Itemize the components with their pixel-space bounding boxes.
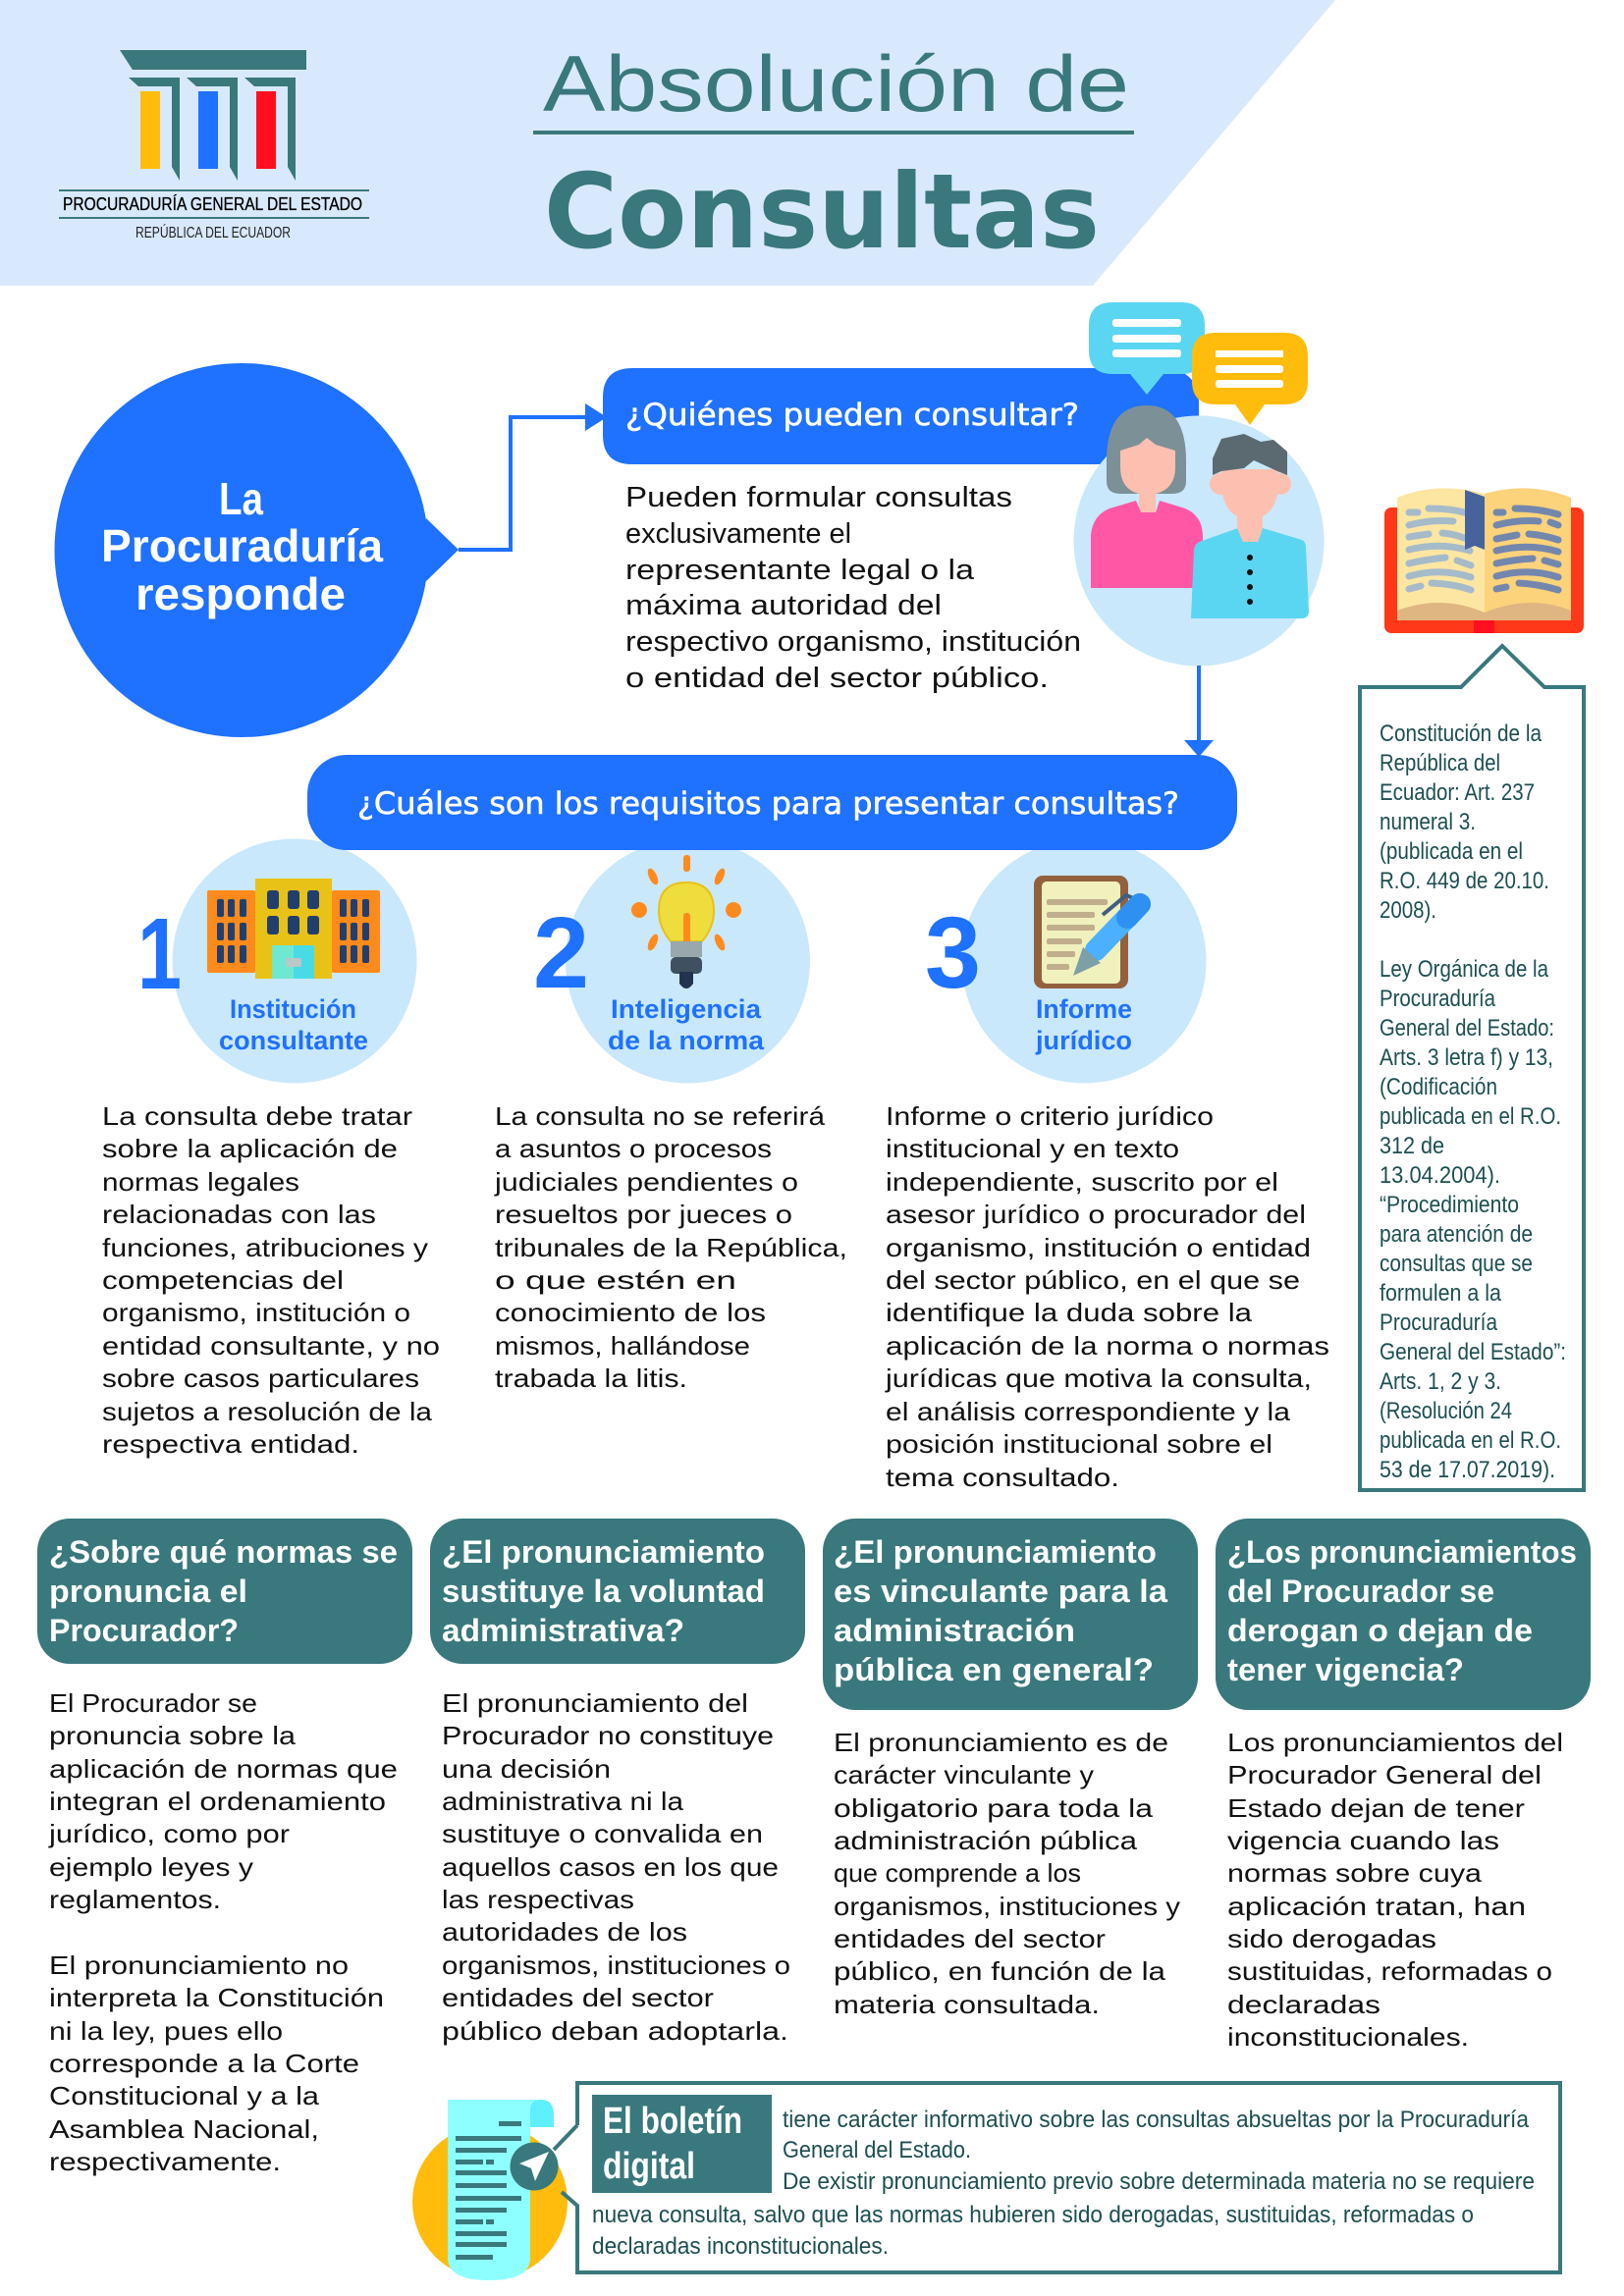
panel: sobre qué normas: respectivamente. [49, 2147, 281, 2176]
text: step 3: jurídicas que motiva la consulta, [885, 1363, 1312, 1393]
panel: legal references: publicada en el R.O. [1380, 1427, 1561, 1454]
panel: vigencia: sido derogadas [1227, 1924, 1436, 1953]
step 1: institución consultante: Institución [230, 994, 356, 1024]
panel: vinculante: administración [834, 1613, 1075, 1648]
text: quiénes pueden consultar: exclusivamente el [625, 518, 851, 550]
panel: El boletín digital: General del Estado. [783, 2137, 971, 2163]
text: step 2: resueltos por jueces o [495, 1200, 792, 1229]
panel: El boletín digital: De existir pronunciamiento previo sobre determinada materia no se requiere [783, 2168, 1535, 2195]
panel: legal references: (publicada en el [1380, 838, 1523, 865]
panel: vigencia: tener vigencia? [1227, 1652, 1464, 1687]
step 1: institución consultante: consultante [219, 1026, 368, 1055]
logo: Procuraduría General del Estado [59, 50, 369, 241]
step 3: informe jurídico: jurídico [1035, 1026, 1132, 1055]
logo: Procuraduría General del Estado: PROCURADURÍA GENERAL DEL ESTADO [63, 194, 362, 214]
panel: sobre qué normas: jurídico, como por [48, 1819, 290, 1848]
text: step 2: judiciales pendientes o [494, 1167, 798, 1197]
panel: sustituye la voluntad administrativa: ¿El pronunciamiento [442, 1534, 765, 1570]
panel: vigencia: del Procurador se [1227, 1574, 1494, 1609]
step 1: institución consultante [137, 879, 380, 1055]
title: Consultas [544, 152, 1100, 272]
text: step 2 [494, 1101, 847, 1393]
panel: sustituye la voluntad administrativa: público deban adoptarla. [442, 2016, 788, 2046]
panel: vigencia: ¿Los pronunciamientos [1227, 1534, 1577, 1570]
panel: legal references: Ley Orgánica de la [1380, 956, 1549, 983]
panel: vinculante: carácter vinculante y [834, 1760, 1094, 1789]
text: step 2: trabada la litis. [495, 1363, 687, 1393]
panel: vigencia: derogan o dejan de [1227, 1613, 1533, 1648]
panel: legal references: 13.04.2004). [1380, 1162, 1500, 1189]
panel: legal references: Procuraduría [1380, 986, 1496, 1012]
panel: El boletín digital: El boletín [603, 2101, 742, 2142]
step 2: inteligencia de la norma: Inteligencia [611, 994, 762, 1024]
panel: legal references: publicada en el R.O. [1380, 1103, 1561, 1130]
text: step 1: entidad consultante, y no [102, 1331, 440, 1361]
icon: open book [1384, 488, 1584, 633]
panel: sobre qué normas: Asamblea Nacional, [49, 2114, 319, 2144]
panel: sustituye la voluntad administrativa: las respectivas [442, 1885, 634, 1914]
pill: Quiénes pueden consultar: ¿Quiénes pueden consultar? [625, 398, 1079, 433]
panel: sobre qué normas: Constitucional y a la [49, 2081, 320, 2110]
text: step 1: sobre casos particulares [102, 1363, 419, 1393]
panel: vigencia: Estado dejan de tener [1227, 1793, 1525, 1823]
panel: sustituye la voluntad administrativa: El pronunciamiento del [442, 1688, 748, 1718]
panel: vinculante: pública en general? [834, 1652, 1154, 1687]
panel: sobre qué normas: integran el ordenamiento [49, 1787, 386, 1816]
panel: sobre qué normas: ni la ley, pues ello [49, 2016, 283, 2046]
panel: vinculante: organismos, instituciones y [834, 1892, 1180, 1921]
text: step 1: La consulta debe tratar [102, 1101, 412, 1131]
panel: legal references: Ecuador: Art. 237 [1380, 779, 1535, 806]
panel: vigencia: Los pronunciamientos del [1227, 1728, 1563, 1757]
callout: La Procuraduría responde [55, 363, 459, 737]
panel: sustituye la voluntad administrativa: Procurador no constituye [442, 1721, 774, 1750]
panel: vinculante: ¿El pronunciamiento [834, 1534, 1157, 1570]
text: step 1: sobre la aplicación de [102, 1134, 398, 1163]
panel: vinculante [823, 1519, 1198, 2019]
panel: vigencia: declaradas [1227, 1990, 1380, 2019]
panel: sobre qué normas: El pronunciamiento no [49, 1950, 349, 1980]
panel: vigencia: aplicación tratan, han [1227, 1892, 1526, 1921]
text: step 2: La consulta no se referirá [495, 1101, 826, 1131]
text: step 2: mismos, hallándose [495, 1331, 750, 1361]
panel: sobre qué normas: ¿Sobre qué normas se [49, 1534, 398, 1570]
panel: legal references: General del Estado: [1380, 1015, 1554, 1041]
text: quiénes pueden consultar: respectivo organismo, institución [625, 626, 1081, 658]
panel: El boletín digital: digital [603, 2146, 695, 2187]
text: step 1: relacionadas con las [102, 1200, 376, 1229]
panel: sustituye la voluntad administrativa: sustituye o convalida en [442, 1819, 763, 1848]
text: step 3: organismo, institución o entidad [886, 1233, 1311, 1262]
panel: legal references: 2008). [1380, 897, 1436, 924]
text: step 1: competencias del [102, 1265, 344, 1295]
text: step 3: aplicación de la norma o normas [886, 1331, 1329, 1361]
arrow: circle to first question [459, 403, 607, 550]
panel: sobre qué normas: El Procurador se [49, 1688, 257, 1718]
text: step 3: identifique la duda sobre la [886, 1298, 1253, 1327]
panel: El boletín digital: tiene carácter informativo sobre las consultas absueltas por la Procuraduría [783, 2107, 1530, 2133]
panel: vinculante: que comprende a los [834, 1858, 1081, 1888]
text: quiénes pueden consultar: máxima autoridad del [625, 590, 942, 621]
text: step 3: posición institucional sobre el [886, 1429, 1272, 1459]
text: step 2: conocimiento de los [495, 1298, 766, 1327]
panel: legal references: 53 de 17.07.2019). [1380, 1457, 1555, 1483]
title [533, 40, 1134, 272]
panel: legal references: (Resolución 24 [1380, 1398, 1512, 1424]
step 3: informe jurídico [925, 876, 1140, 1055]
panel: sustituye la voluntad administrativa: administrativa ni la [442, 1787, 684, 1816]
text: quiénes pueden consultar: Pueden formular consultas [625, 482, 1012, 513]
text: step 3: institucional y en texto [886, 1134, 1179, 1163]
panel: legal references: 312 de [1380, 1133, 1444, 1159]
panel: sustituye la voluntad administrativa: sustituye la voluntad [442, 1574, 765, 1609]
panel: El boletín digital: nueva consulta, salvo que las normas hubieren sido derogadas, sustituidas, reformadas o [592, 2202, 1474, 2228]
text: step 3: tema consultado. [886, 1463, 1119, 1492]
panel: vinculante: materia consultada. [834, 1990, 1100, 2019]
panel: vigencia: normas sobre cuya [1227, 1858, 1483, 1888]
logo: Procuraduría General del Estado: REPÚBLICA DEL ECUADOR [135, 223, 291, 241]
step 2: inteligencia de la norma: 2 [533, 896, 589, 1009]
pill: requisitos [307, 755, 1237, 850]
panel: vigencia: vigencia cuando las [1227, 1826, 1499, 1855]
text: step 1: respectiva entidad. [102, 1429, 359, 1459]
panel: legal references: República del [1380, 750, 1500, 776]
panel: sobre qué normas: pronuncia sobre la [49, 1721, 297, 1750]
step 3: informe jurídico: 3 [925, 896, 981, 1009]
panel: sustituye la voluntad administrativa [430, 1519, 805, 2046]
panel: vigencia: sustituidas, reformadas o [1227, 1956, 1552, 1986]
title: Absolución de [543, 40, 1129, 129]
text: step 1: organismo, institución o [102, 1298, 410, 1327]
panel: vinculante: obligatorio para toda la [834, 1793, 1154, 1823]
text: step 3 [885, 1101, 1329, 1492]
panel: legal references: Arts. 3 letra f) y 13, [1380, 1044, 1553, 1071]
text: step 1: normas legales [102, 1167, 299, 1197]
text: step 3: Informe o criterio jurídico [886, 1101, 1214, 1131]
panel: vinculante: es vinculante para la [834, 1574, 1167, 1609]
panel: legal references: consultas que se [1380, 1251, 1533, 1277]
panel: sobre qué normas: corresponde a la Corte [49, 2049, 359, 2078]
panel: sustituye la voluntad administrativa: una decisión [442, 1754, 611, 1784]
text: step 1 [102, 1101, 440, 1459]
panel: sobre qué normas: pronuncia el [49, 1574, 247, 1609]
panel: vinculante: público, en función de la [834, 1956, 1166, 1986]
text: step 2: o que estén en [495, 1265, 736, 1295]
panel: vinculante: entidades del sector [834, 1924, 1106, 1953]
panel: vinculante: administración pública [834, 1826, 1138, 1855]
pill: requisitos: ¿Cuáles son los requisitos para presentar consultas? [357, 786, 1179, 822]
text: step 2: tribunales de la República, [495, 1233, 847, 1262]
text: step 3: asesor jurídico o procurador del [886, 1200, 1306, 1229]
icon: digital bulletin paper [412, 2100, 568, 2280]
text: quiénes pueden consultar [625, 482, 1081, 694]
panel: legal references: Arts. 1, 2 y 3. [1380, 1368, 1501, 1395]
panel: sobre qué normas: aplicación de normas que [49, 1754, 398, 1784]
callout: La Procuraduría responde: La [219, 473, 263, 524]
text: step 3: el análisis correspondiente y la [886, 1397, 1291, 1426]
step 2: inteligencia de la norma [533, 855, 765, 1055]
panel: legal references: numeral 3. [1380, 809, 1476, 835]
text: step 3: del sector público, en el que se [886, 1265, 1300, 1295]
panel: legal references [1360, 646, 1584, 1490]
panel: vigencia: Procurador General del [1227, 1760, 1542, 1789]
panel: legal references: “Procedimiento [1380, 1192, 1519, 1218]
panel: vigencia [1216, 1519, 1591, 2052]
panel: legal references: para atención de [1380, 1221, 1533, 1248]
panel: sobre qué normas: ejemplo leyes y [49, 1852, 253, 1882]
step 3: informe jurídico: Informe [1036, 994, 1132, 1024]
panel: El boletín digital [554, 2083, 1560, 2272]
panel: legal references: formulen a la [1380, 1280, 1502, 1307]
panel: legal references: General del Estado”: [1380, 1339, 1566, 1365]
panel: sustituye la voluntad administrativa: organismos, instituciones o [442, 1950, 790, 1980]
text: step 2: a asuntos o procesos [495, 1134, 772, 1163]
panel: sobre qué normas: interpreta la Constitución [49, 1983, 384, 2012]
panel: El boletín digital: declaradas inconstitucionales. [592, 2233, 889, 2260]
panel: sustituye la voluntad administrativa: aquellos casos en los que [442, 1852, 779, 1882]
icon: people with speech bubbles [1074, 302, 1324, 666]
panel: legal references: R.O. 449 de 20.10. [1380, 868, 1549, 894]
text: quiénes pueden consultar: representante legal o la [625, 555, 975, 586]
panel: legal references: (Codificación [1380, 1074, 1497, 1100]
arrow: down to requirements [1184, 666, 1214, 757]
panel: sustituye la voluntad administrativa: autoridades de los [442, 1917, 687, 1947]
text: step 1: sujetos a resolución de la [102, 1397, 433, 1426]
callout: La Procuraduría responde: Procuraduría [101, 520, 383, 571]
step circle backgrounds [173, 838, 1206, 1084]
callout: La Procuraduría responde: responde [135, 568, 346, 619]
header band [0, 0, 1335, 286]
panel: vigencia: inconstitucionales. [1227, 2022, 1469, 2052]
panel: sustituye la voluntad administrativa: administrativa? [442, 1613, 684, 1648]
panel: sobre qué normas: Procurador? [49, 1613, 239, 1648]
pill: Quiénes pueden consultar [603, 368, 1199, 464]
text: step 1: funciones, atribuciones y [102, 1233, 428, 1262]
step 2: inteligencia de la norma: de la norma [608, 1026, 765, 1055]
panel: legal references: Procuraduría [1380, 1309, 1498, 1336]
panel: sobre qué normas [37, 1519, 412, 2176]
panel: sustituye la voluntad administrativa: entidades del sector [442, 1983, 714, 2012]
step 1: institución consultante: 1 [137, 897, 182, 1010]
panel: sobre qué normas: reglamentos. [49, 1885, 221, 1914]
text: step 3: independiente, suscrito por el [886, 1167, 1278, 1197]
panel: vinculante: El pronunciamiento es de [834, 1728, 1168, 1757]
text: quiénes pueden consultar: o entidad del sector público. [625, 663, 1049, 694]
panel: legal references: Constitución de la [1380, 721, 1543, 747]
